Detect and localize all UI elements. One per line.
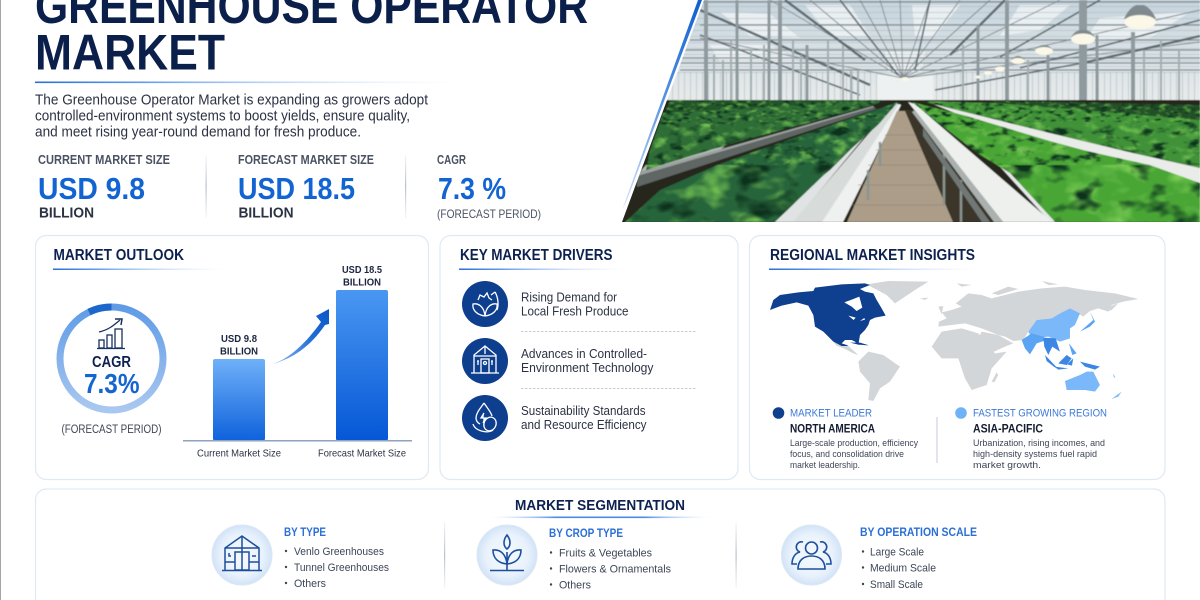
segment: by crop type: Flowers & Ornamentals <box>559 564 671 576</box>
left trough <box>640 146 725 172</box>
stat: CAGR: (FORECAST PERIOD) <box>437 207 541 221</box>
segment: by operation scale: Medium Scale <box>870 562 936 574</box>
heading: regional market insights: REGIONAL MARKET INSIGHTS <box>770 247 975 264</box>
bar chart: USD 9.8 <box>221 333 257 345</box>
stat: forecast market size: USD 18.5 <box>238 171 355 206</box>
legend: market leader: focus, and consolidation drive <box>790 449 904 460</box>
arrow <box>273 309 329 364</box>
bar chart: Forecast Market Size <box>318 448 406 460</box>
legend: market leader: MARKET LEADER <box>790 408 872 420</box>
heading: key market drivers: KEY MARKET DRIVERS <box>460 247 612 264</box>
segment: by type <box>212 525 389 590</box>
plants <box>625 100 1200 222</box>
intro paragraph <box>35 92 428 140</box>
icon: controlled greenhouse <box>462 338 508 384</box>
stat: forecast market size: FORECAST MARKET SIZE <box>238 153 374 167</box>
segment: by crop type: Fruits & Vegetables <box>559 548 652 560</box>
legend: fastest growing region <box>955 407 1107 471</box>
left rail <box>637 106 876 187</box>
lamps <box>1011 5 1156 60</box>
white glass highlights <box>710 5 1190 72</box>
driver 3: and Resource Efficiency <box>521 418 647 432</box>
driver 1: Rising Demand for <box>521 290 617 304</box>
CAGR ring <box>60 307 163 410</box>
stat: current market size: BILLION <box>39 206 94 222</box>
driver 1: Local Fresh Produce <box>521 304 629 318</box>
bar chart <box>183 264 412 460</box>
stat: current market size: CURRENT MARKET SIZE <box>38 153 170 167</box>
heading: market segmentation: MARKET SEGMENTATION <box>515 498 685 514</box>
segment: by operation scale: BY OPERATION SCALE <box>860 527 977 539</box>
right mid rail <box>933 104 1200 185</box>
bar chart: BILLION <box>343 276 381 288</box>
driver 2 <box>462 338 654 384</box>
stat: CAGR <box>437 153 541 221</box>
legend: fastest growing region: high-density systems fuel rapid <box>973 449 1097 460</box>
left near trough <box>774 138 864 222</box>
left gutter <box>793 103 901 222</box>
panel: market outlook <box>36 236 428 480</box>
stat: current market size: USD 9.8 <box>38 171 145 206</box>
intro paragraph: controlled-environment systems to boost yields, ensure quality, <box>35 108 410 124</box>
CAGR ring: CAGR <box>92 354 131 371</box>
legend: fastest growing region: Urbanization, rising incomes, and <box>973 438 1105 449</box>
world map <box>770 281 1138 401</box>
legend: market leader: market leadership. <box>790 460 860 471</box>
segment: by type: Others <box>294 578 326 590</box>
bar chart: Current Market Size <box>197 448 281 460</box>
segment: by operation scale <box>782 525 977 591</box>
right gutter <box>908 102 1052 222</box>
segment: by crop type: BY CROP TYPE <box>549 528 623 540</box>
icon: greenhouse <box>212 525 272 585</box>
driver 3 <box>462 395 647 441</box>
segment: by type: Venlo Greenhouses <box>294 546 384 558</box>
bar chart: BILLION <box>220 346 258 358</box>
intro paragraph: The Greenhouse Operator Market is expanding as growers adopt <box>35 92 428 108</box>
icon: water drop and leaf <box>462 395 508 441</box>
segment: by type: Tunnel Greenhouses <box>294 562 389 574</box>
right near trough <box>1000 166 1056 222</box>
legend: market leader: Large-scale production, efficiency <box>790 438 918 449</box>
driver 1 <box>462 281 629 327</box>
ground under rows <box>620 100 1200 225</box>
legend: fastest growing region: market growth. <box>973 460 1041 471</box>
walkway frames <box>868 142 961 222</box>
segment: by type: BY TYPE <box>284 527 326 539</box>
legend: market leader <box>773 407 918 471</box>
icon: fresh produce <box>462 281 508 327</box>
photo: greenhouse interior <box>620 0 1200 225</box>
driver 2: Advances in Controlled- <box>521 347 647 361</box>
stat: CAGR: 7.3 % <box>438 171 506 206</box>
icon: seedling <box>477 525 537 585</box>
panel: key market drivers <box>440 236 738 480</box>
bar chart: USD 18.5 <box>342 264 382 276</box>
segment: by operation scale: Large Scale <box>870 546 924 558</box>
legend: market leader: NORTH AMERICA <box>790 424 875 436</box>
stat: forecast market size: BILLION <box>238 206 294 222</box>
title: MARKET <box>35 24 225 80</box>
segment: by crop type: Others <box>559 580 591 592</box>
back wall <box>877 75 933 96</box>
walkway <box>905 110 993 222</box>
intro paragraph: and meet rising year-round demand for fresh produce. <box>35 124 361 140</box>
legend: fastest growing region: ASIA-PACIFIC <box>973 424 1043 436</box>
segment: by operation scale: Small Scale <box>870 579 923 591</box>
title <box>35 0 588 80</box>
stat: current market size <box>38 153 170 222</box>
legend: fastest growing region: FASTEST GROWING REGION <box>973 408 1107 420</box>
heading: market outlook: MARKET OUTLOOK <box>54 247 185 264</box>
accent stripe <box>622 0 702 210</box>
icon: growth chart <box>97 319 125 348</box>
panel: market outlook: (FORECAST PERIOD) <box>62 424 162 436</box>
driver 2: Environment Technology <box>521 361 654 375</box>
stat: forecast market size <box>238 153 374 222</box>
icon: people <box>782 525 842 585</box>
driver 3: Sustainability Standards <box>521 404 646 418</box>
panel: market segmentation <box>36 489 1165 600</box>
panel: regional market insights <box>750 236 1165 480</box>
segment: by crop type <box>477 525 671 592</box>
CAGR ring: 7.3% <box>84 368 140 399</box>
stat: CAGR: CAGR <box>437 153 466 167</box>
